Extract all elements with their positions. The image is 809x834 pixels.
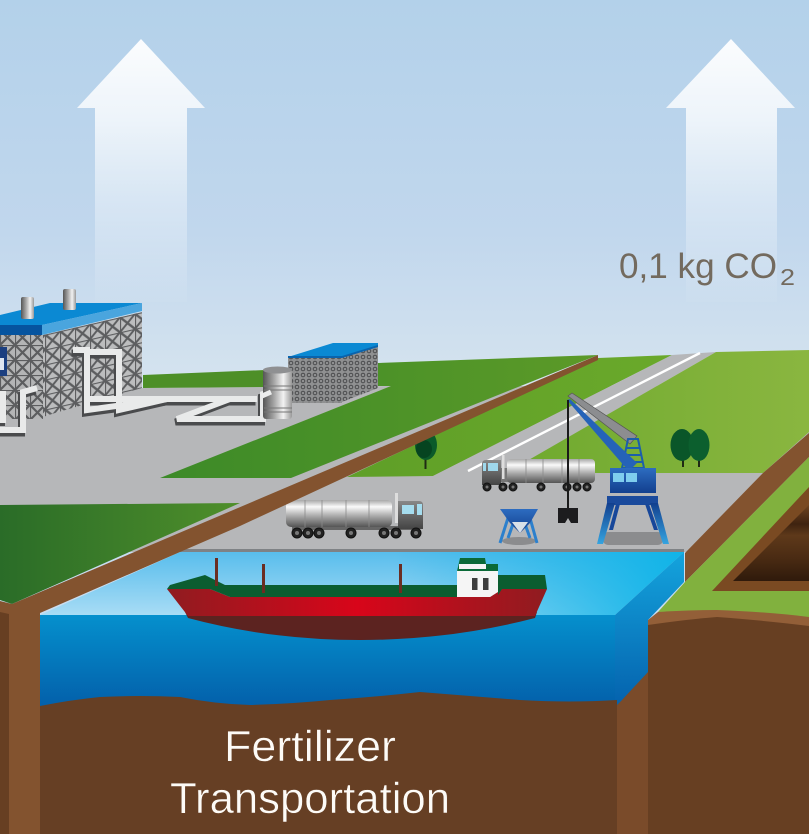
CO2 label: 2 bbox=[780, 264, 795, 290]
ship cabin bbox=[457, 558, 498, 597]
roof vents bbox=[21, 289, 76, 319]
front left green field bbox=[0, 503, 240, 604]
sky background bbox=[0, 0, 809, 390]
canal bed soil bbox=[40, 692, 617, 834]
crane grab bbox=[558, 508, 578, 523]
hopper bbox=[500, 509, 538, 545]
green field near plant bbox=[160, 355, 598, 478]
canal water side bbox=[615, 552, 684, 710]
left emission arrow bbox=[77, 39, 205, 302]
quay edge bbox=[180, 549, 684, 553]
title: Transportation bbox=[170, 774, 450, 823]
crane shadow bbox=[603, 532, 663, 545]
ship stern deck bbox=[498, 575, 547, 595]
ship lower hull bbox=[185, 612, 537, 640]
cargo ship bbox=[167, 558, 547, 640]
left brown embankment strip bbox=[0, 355, 598, 834]
pipework bbox=[0, 350, 270, 433]
crane bbox=[558, 393, 669, 545]
crane jib lattice bbox=[568, 393, 637, 444]
front tanker truck bbox=[286, 493, 423, 538]
right green bank bbox=[658, 457, 809, 620]
ship masts bbox=[215, 558, 402, 593]
building roof bbox=[0, 303, 142, 335]
crane boom bbox=[567, 399, 637, 469]
canal water front bbox=[40, 615, 617, 710]
title bbox=[170, 722, 450, 823]
ship red hull bbox=[167, 589, 547, 616]
CO2 label: 0,1 kg CO bbox=[619, 247, 777, 286]
title: Fertilizer bbox=[224, 722, 396, 771]
crane cable bbox=[567, 400, 569, 508]
soil under canal side bbox=[617, 672, 648, 834]
tree near strip bbox=[415, 430, 437, 469]
ship bow deck bbox=[167, 575, 457, 597]
company logo sign bbox=[0, 347, 7, 376]
crane cab bbox=[610, 468, 656, 493]
pair of trees bbox=[670, 429, 710, 467]
building walls bbox=[0, 312, 142, 419]
crane gantry bbox=[597, 496, 669, 544]
left soil side bbox=[0, 612, 9, 834]
grey ground bbox=[0, 386, 809, 552]
crane tower bbox=[622, 439, 644, 468]
main plant building bbox=[0, 289, 142, 419]
second lattice building bbox=[288, 343, 378, 403]
right emission arrow bbox=[666, 39, 795, 302]
rear tanker truck bbox=[482, 455, 595, 491]
road bbox=[433, 352, 716, 476]
right soil block bbox=[648, 610, 809, 834]
green field right of road bbox=[506, 350, 809, 473]
green field beside road bbox=[347, 355, 672, 477]
back green strip bbox=[143, 370, 265, 388]
trench bbox=[712, 487, 809, 591]
canal water surface bbox=[40, 552, 684, 615]
storage tank bbox=[262, 366, 292, 419]
right brown embankment strip bbox=[685, 433, 809, 582]
